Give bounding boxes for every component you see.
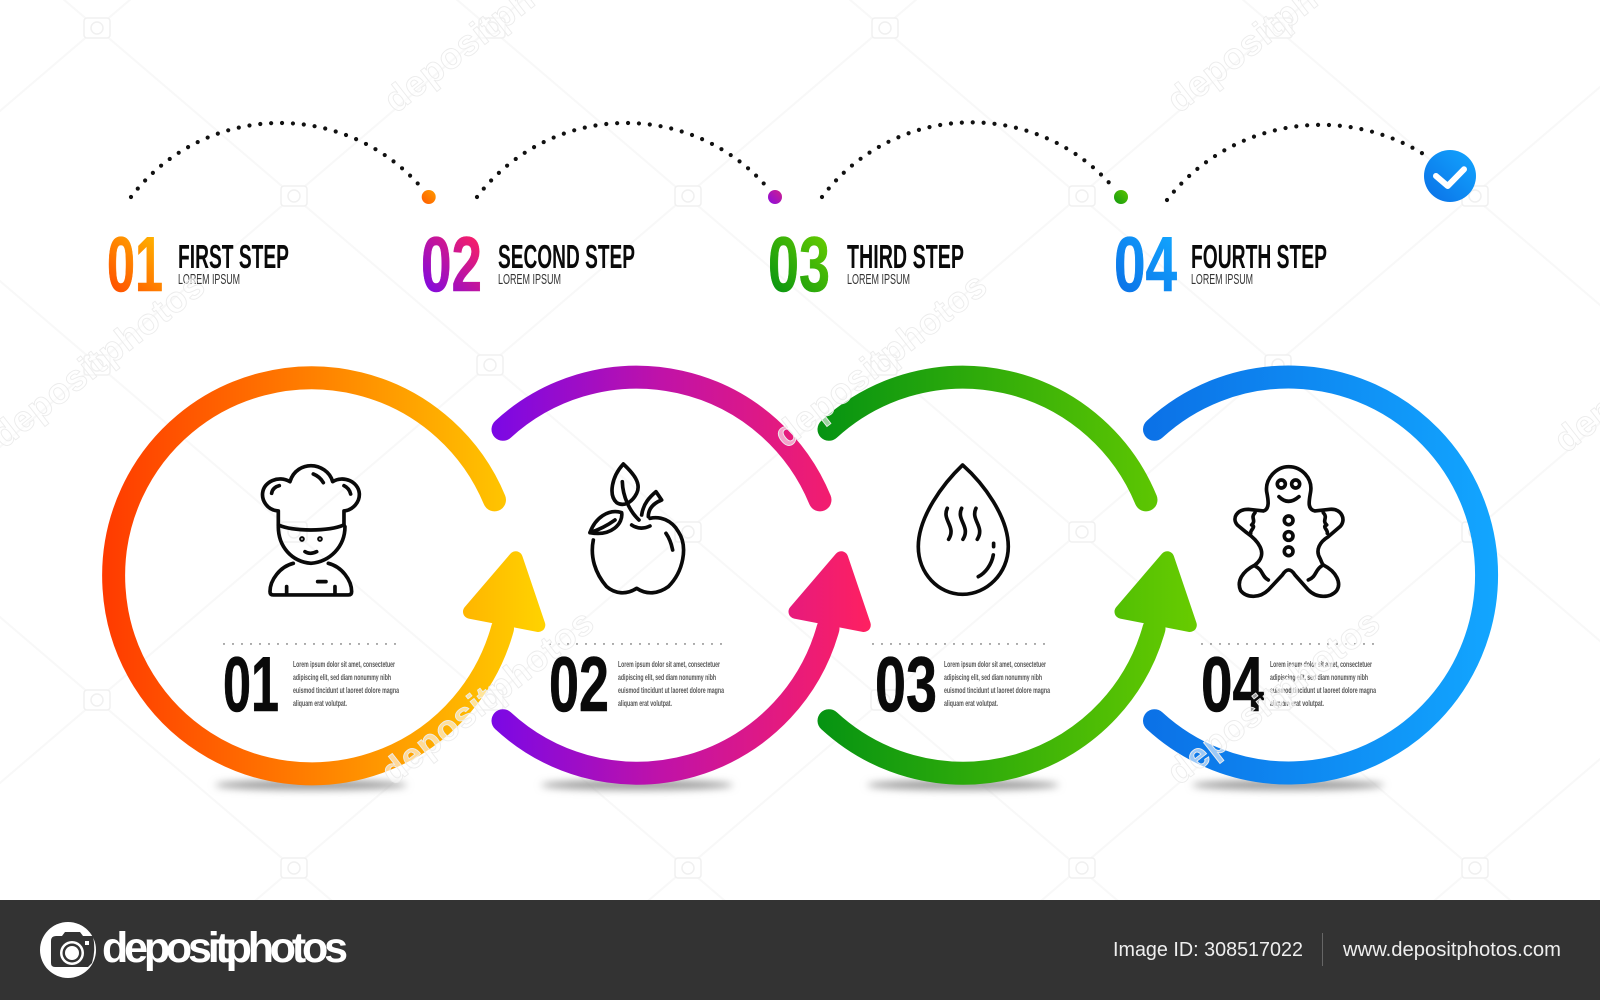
- dotted arc 2: [477, 123, 766, 197]
- step text 3: 03: [875, 640, 937, 728]
- step text 1: aliquam erat volutpat.: [293, 698, 347, 708]
- website: www.depositphotos.com: [1342, 939, 1561, 961]
- watermarks: depositphotos: [1159, 601, 1387, 792]
- step text 2: [549, 640, 727, 728]
- step heading 4: [1114, 220, 1327, 308]
- watermarks: depositphotos: [766, 264, 994, 455]
- marker dot 1: [422, 190, 436, 204]
- step text 3: euismod tincidunt ut laoreet dolore magna: [944, 685, 1050, 695]
- step text 1: 01: [223, 640, 279, 728]
- ring arrow 2: [503, 377, 864, 773]
- footer bar: [0, 900, 1600, 1000]
- timeline: dotted arcs and markers: [131, 122, 1476, 204]
- step heading 1: FIRST STEP: [178, 238, 289, 275]
- step heading 3: THIRD STEP: [847, 238, 964, 275]
- step heading 2: 02: [421, 220, 482, 308]
- step text 2: Lorem ipsum dolor sit amet, consectetuer: [618, 659, 720, 669]
- watermarks: [0, 0, 1600, 792]
- ring arc 4: [1154, 377, 1487, 773]
- step heading 3: 03: [768, 220, 830, 308]
- step text 3: adipiscing elit, sed diam nonummy nibh: [944, 672, 1042, 682]
- step text 4: euismod tincidunt ut laoreet dolore magna: [1270, 685, 1376, 695]
- ring arrow 1: [114, 378, 538, 774]
- step heading 3: LOREM IPSUM: [847, 272, 910, 288]
- step heading 2: [421, 220, 635, 308]
- panel: step 1 circle: [114, 378, 538, 774]
- step text 2: adipiscing elit, sed diam nonummy nibh: [618, 672, 716, 682]
- icon: hot water drop: [918, 465, 1008, 594]
- step heading 2: SECOND STEP: [498, 238, 635, 275]
- step text 4: 04: [1201, 640, 1264, 728]
- step text 1: [223, 640, 399, 728]
- panel: step 2 circle: [503, 377, 864, 773]
- step heading 4: FOURTH STEP: [1191, 238, 1327, 275]
- icon: gingerbread man: [1235, 467, 1343, 596]
- step text 4: adipiscing elit, sed diam nonummy nibh: [1270, 672, 1368, 682]
- panel: step 3 circle: [829, 377, 1190, 773]
- step heading 3: [768, 220, 964, 308]
- step text 2: aliquam erat volutpat.: [618, 698, 672, 708]
- step text 1: adipiscing elit, sed diam nonummy nibh: [293, 672, 391, 682]
- step text 2: 02: [549, 640, 609, 728]
- step text 2: euismod tincidunt ut laoreet dolore magna: [618, 685, 724, 695]
- step text 4: [1201, 640, 1376, 728]
- step text 3: aliquam erat volutpat.: [944, 698, 998, 708]
- ring arrow 3: [829, 377, 1190, 773]
- step heading 1: LOREM IPSUM: [178, 272, 240, 288]
- dotted arc 3: [822, 122, 1112, 197]
- step heading 2: LOREM IPSUM: [498, 272, 561, 288]
- image id: Image ID: 308517022: [1113, 939, 1303, 961]
- step heading 1: [107, 220, 289, 308]
- step heading 1: 01: [107, 220, 163, 308]
- dotted arc 1: [131, 123, 420, 197]
- step heading 4: LOREM IPSUM: [1191, 272, 1253, 288]
- marker dot 2: [768, 190, 782, 204]
- icon: chef: [263, 466, 359, 595]
- watermarks: depositphotos: [373, 601, 601, 792]
- ring shadows: [215, 780, 1384, 790]
- dotted arc 4: [1167, 125, 1425, 200]
- step heading 4: 04: [1114, 220, 1177, 308]
- panel: step 4 circle: [1154, 377, 1487, 773]
- step text 1: euismod tincidunt ut laoreet dolore magna: [293, 685, 399, 695]
- marker dot 3: [1114, 190, 1128, 204]
- step text 1: Lorem ipsum dolor sit amet, consectetuer: [293, 659, 395, 669]
- logo wordmark: depositphotos: [102, 924, 348, 972]
- step text 3: [873, 640, 1052, 728]
- step text 4: aliquam erat volutpat.: [1270, 698, 1324, 708]
- step text 3: Lorem ipsum dolor sit amet, consectetuer: [944, 659, 1046, 669]
- icon: apple: [590, 464, 684, 593]
- step text 4: Lorem ipsum dolor sit amet, consectetuer: [1270, 659, 1372, 669]
- icon: camera logo: [40, 922, 96, 978]
- icon: blue check badge: [1424, 150, 1476, 202]
